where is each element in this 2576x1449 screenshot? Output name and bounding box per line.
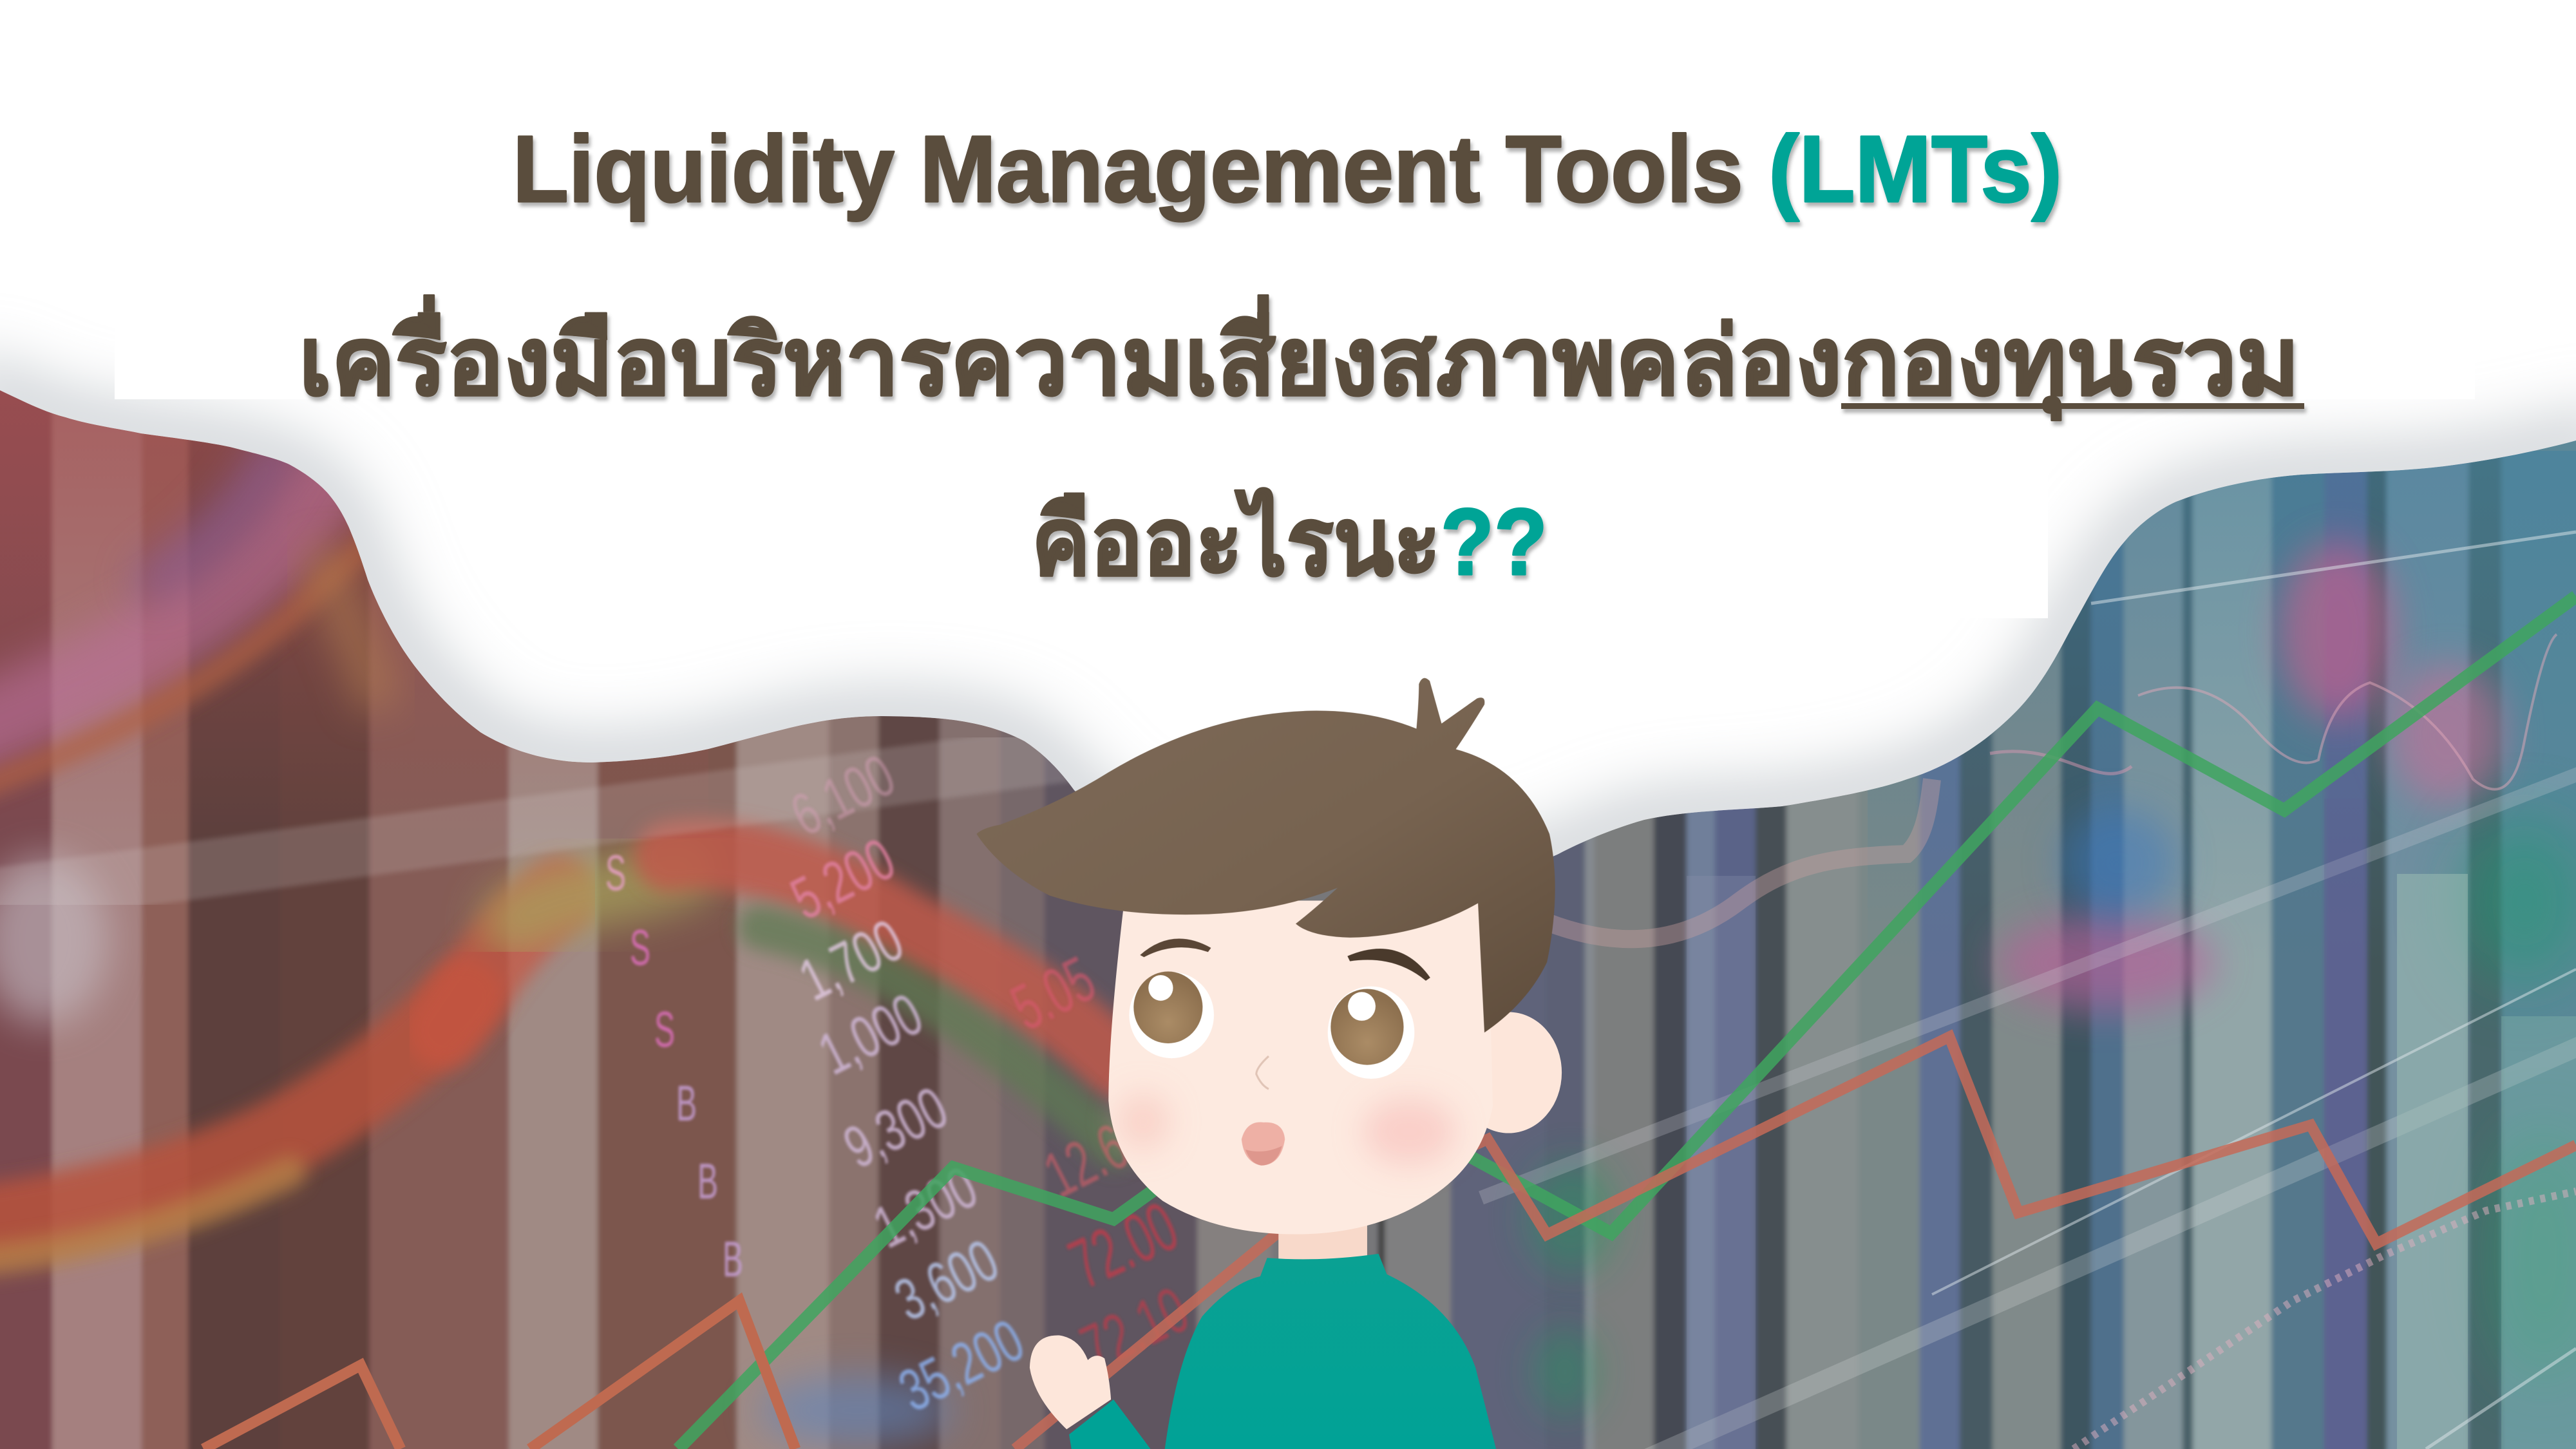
ticker numbers: 9,300: [833, 1074, 958, 1180]
ticker numbers: B: [697, 1153, 718, 1209]
background: stock market chart collage: [0, 322, 2576, 1449]
blurred colour bands: [0, 451, 2576, 1449]
background stripes: [0, 322, 2576, 1449]
hair: [976, 678, 1555, 1032]
raised hand: [1030, 1336, 1162, 1449]
ticker numbers: 3,600: [884, 1226, 1009, 1333]
ticker numbers: B: [676, 1075, 697, 1132]
bars in background: [1687, 799, 2576, 1449]
line chart: red trend right: [1015, 1037, 2576, 1449]
title line 1: Liquidity Management Tools (LMTs): [513, 117, 2062, 222]
eye left: [1129, 971, 1214, 1058]
neck: [1278, 1214, 1367, 1262]
ticker numbers: 1,700: [789, 906, 913, 1013]
ticker numbers: S: [654, 1001, 675, 1057]
ticker numbers: 35,200: [889, 1306, 1034, 1424]
ticker numbers: S: [630, 919, 650, 976]
nose: [1256, 1056, 1269, 1089]
eye right: [1328, 987, 1414, 1079]
line chart: red trend left: [204, 1365, 401, 1449]
sweater: [1162, 1254, 1500, 1449]
ticker numbers: S: [605, 844, 626, 901]
face: [1108, 900, 1493, 1235]
ticker numbers: 72.00: [1058, 1188, 1189, 1304]
cheeks: [1116, 1093, 1456, 1165]
ticker numbers: [605, 741, 1199, 1424]
ticker numbers: 12.6: [1033, 1110, 1139, 1212]
thin light trend lines: [1546, 532, 2576, 1449]
ticker numbers: 1,300: [863, 1153, 987, 1260]
eyebrow right: [1347, 949, 1430, 981]
ticker numbers: 72.10: [1070, 1273, 1199, 1385]
ticker numbers: 6,100: [781, 741, 905, 848]
tinted upper areas: [0, 386, 2576, 966]
line chart: red trend middle: [530, 1301, 795, 1449]
ticker numbers: B: [723, 1231, 743, 1287]
mouth: [1242, 1122, 1285, 1166]
title line 2: เครื่องมือบริหารความเสี่ยงสภาพคล่องกองทุนรวม: [299, 295, 2300, 421]
ticker numbers: 5.05: [1000, 943, 1106, 1045]
boy character: [976, 678, 1562, 1449]
eyebrow left: [1140, 938, 1211, 957]
underline under กองทุนรวม: [1841, 403, 2304, 409]
title line 3: คืออะไรนะ??: [1032, 488, 1548, 595]
ear: [1455, 1012, 1562, 1133]
line chart: green trend: [678, 596, 2576, 1449]
title text: [299, 117, 2304, 595]
ticker numbers: 5,200: [781, 825, 905, 932]
ticker numbers: 1,000: [808, 980, 933, 1087]
white thought cloud: [0, 317, 2576, 857]
